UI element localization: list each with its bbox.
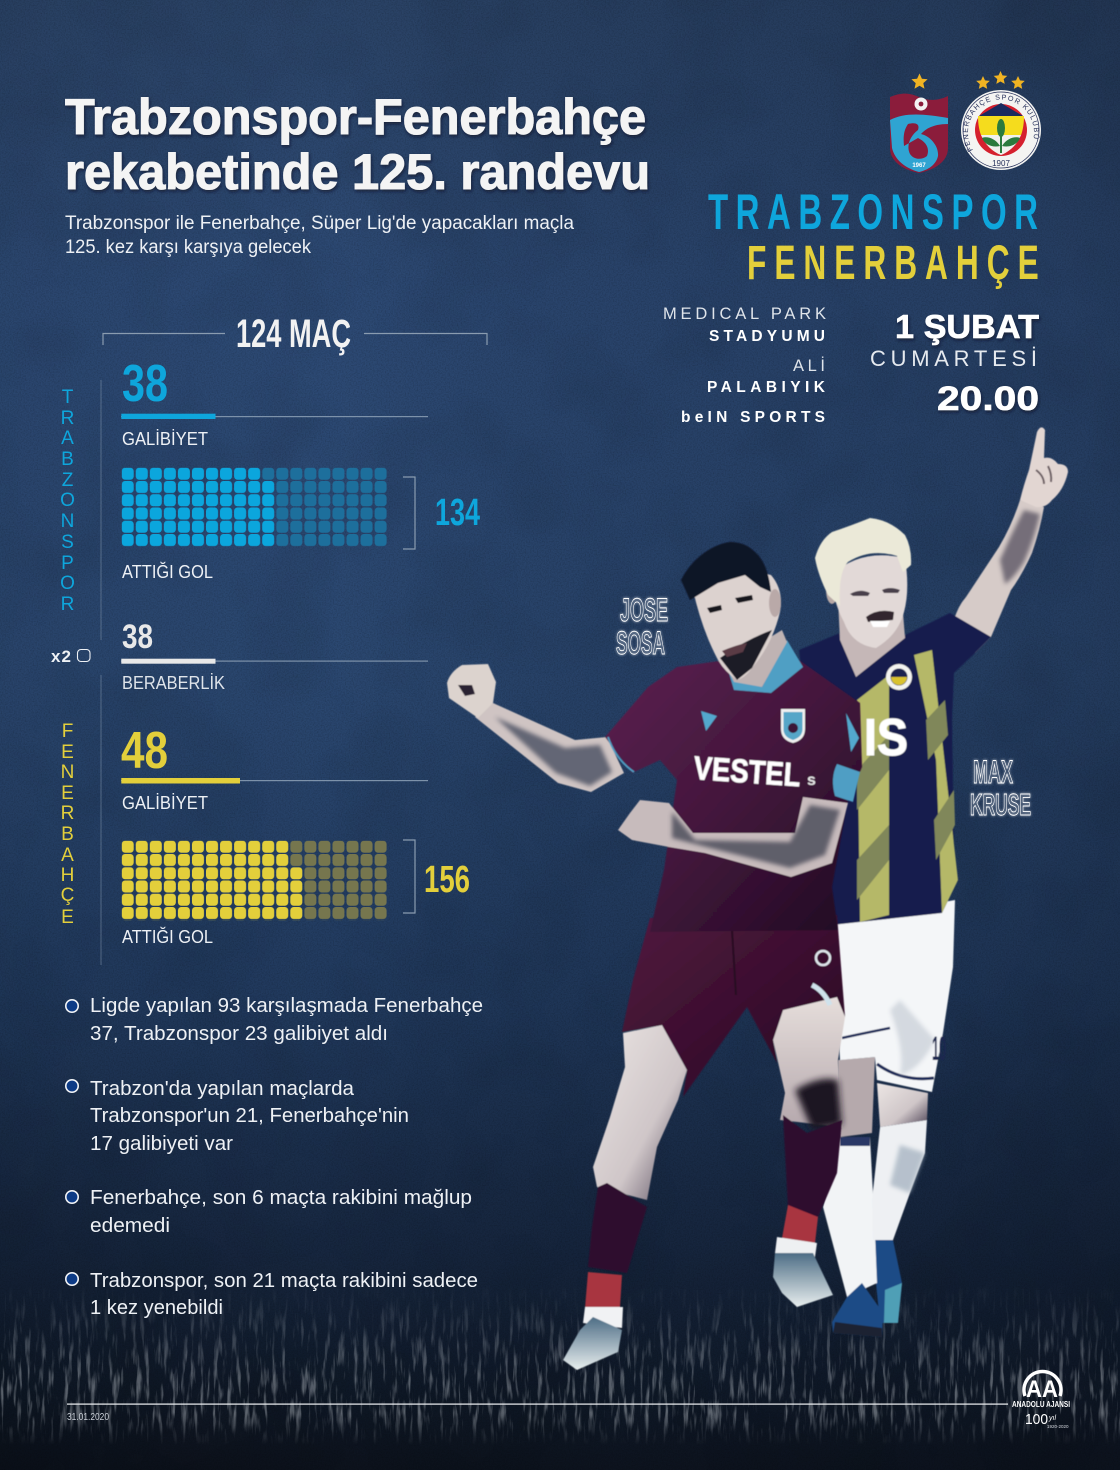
neck bbox=[725, 630, 787, 687]
face bbox=[693, 572, 781, 680]
date: 31.01.2020 bbox=[67, 1412, 109, 1423]
fact 3 bbox=[66, 1187, 472, 1237]
fact 2: Trabzon'da yapılan maçlarda bbox=[90, 1078, 355, 1100]
jersey sponsor: IS bbox=[864, 709, 908, 767]
fact 2: 17 galibiyeti var bbox=[90, 1133, 233, 1155]
Fenerbahçe wins: GALİBİYET bbox=[122, 793, 208, 813]
Anadolu Ajansi logo: 1920-2020 bbox=[1047, 1424, 1069, 1429]
sleeve trim bbox=[608, 737, 634, 772]
title: Trabzonspor-Fenerbahçe bbox=[65, 89, 646, 145]
vertical label: Trabzonspor: A bbox=[61, 428, 74, 449]
vertical label: Trabzonspor: Z bbox=[62, 470, 74, 491]
match date and time bbox=[870, 308, 1039, 418]
vertical label: Trabzonspor: O bbox=[60, 573, 75, 594]
fact 1: Ligde yapılan 93 karşılaşmada Fenerbahçe bbox=[90, 995, 483, 1017]
title bbox=[65, 89, 650, 200]
match date and time: CUMARTESİ bbox=[870, 346, 1037, 371]
Anadolu Ajansi logo: 100 bbox=[1025, 1411, 1048, 1428]
vertical label: Fenerbahçe: F bbox=[62, 721, 73, 742]
Anadolu Ajansi logo: AA bbox=[1026, 1376, 1058, 1403]
icon: Trabzonspor crest bbox=[890, 74, 948, 173]
lower arm bbox=[618, 797, 848, 877]
label: Jose Sosa bbox=[616, 592, 668, 661]
vertical label: Fenerbahçe: B bbox=[61, 824, 74, 845]
player: Max Kruse: 10 bbox=[932, 1030, 946, 1068]
vertical label: Trabzonspor: N bbox=[61, 511, 74, 532]
vertical label: Fenerbahçe: A bbox=[61, 845, 74, 866]
icon: Fenerbahçe crest: FENERBAHÇE SPOR KULÜBÜ bbox=[963, 94, 1040, 152]
captain armband bbox=[833, 764, 860, 802]
heading: Trabzonspor: TRABZONSPOR bbox=[708, 184, 1038, 240]
match details: venue, referee, broadcaster: ALİ bbox=[793, 356, 825, 375]
jersey crest bbox=[781, 709, 805, 743]
Anadolu Ajansi logo: ANADOLU AJANSI bbox=[1012, 1399, 1070, 1409]
legs bbox=[563, 997, 845, 1370]
footer rule bbox=[67, 1404, 1008, 1405]
fact 2 bbox=[66, 1078, 409, 1155]
jersey bbox=[605, 660, 862, 932]
fact list bbox=[66, 995, 483, 1319]
vertical label: Fenerbahçe: E bbox=[61, 783, 74, 804]
draws: BERABERLİK bbox=[122, 673, 225, 693]
fact 1: 37, Trabzonspor 23 galibiyet aldı bbox=[90, 1023, 388, 1045]
label: Max Kruse bbox=[970, 754, 1031, 822]
match details: venue, referee, broadcaster: STADYUMU bbox=[709, 328, 825, 345]
vertical label: Trabzonspor: S bbox=[61, 532, 74, 553]
label: Jose Sosa: JOSE bbox=[620, 592, 668, 628]
vertical label: Trabzonspor: T bbox=[62, 387, 74, 408]
title: rekabetinde 125. randevu bbox=[65, 144, 650, 200]
subtitle: 125. kez karşı karşıya gelecek bbox=[65, 237, 311, 258]
neck bbox=[838, 600, 905, 677]
collar bbox=[726, 640, 803, 693]
player: Max Kruse bbox=[799, 427, 1068, 1337]
Fenerbahçe wins bbox=[121, 722, 428, 813]
label: Jose Sosa: SOSA bbox=[616, 625, 665, 661]
subtitle bbox=[65, 213, 574, 258]
shorts bbox=[622, 915, 845, 1097]
fact 3: edemedi bbox=[90, 1215, 170, 1237]
Anadolu Ajansi logo: yıl bbox=[1048, 1415, 1056, 1422]
jersey bbox=[799, 613, 991, 925]
vertical label: Fenerbahçe: H bbox=[61, 865, 74, 886]
raised arm and hand bbox=[954, 427, 1068, 653]
vertical label: Fenerbahçe: N bbox=[61, 762, 74, 783]
Trabzonspor goals dot chart: ATTIĞI GOL bbox=[122, 561, 213, 582]
fact 4: Trabzonspor, son 21 maçta rakibini sadece bbox=[90, 1270, 478, 1292]
match details: venue, referee, broadcaster bbox=[663, 305, 826, 426]
vertical label: Trabzonspor: R bbox=[61, 594, 74, 615]
Fenerbahçe goals dot chart: 156 bbox=[424, 859, 470, 901]
vertical label: Trabzonspor: O bbox=[60, 490, 75, 511]
jersey stripes bbox=[857, 650, 958, 922]
vertical label: Trabzonspor: R bbox=[61, 408, 74, 429]
hair bbox=[681, 542, 771, 600]
icon: Trabzonspor crest: 1967 bbox=[912, 163, 926, 169]
vertical label: Fenerbahçe: E bbox=[61, 742, 74, 763]
vertical label: Trabzonspor bbox=[60, 387, 75, 615]
kit logos bbox=[701, 711, 859, 752]
draws: 38 bbox=[122, 618, 153, 656]
hair bbox=[815, 518, 911, 606]
Trabzonspor goals dot chart: 134 bbox=[435, 492, 480, 534]
Fenerbahçe goals dot chart: ATTIĞI GOL bbox=[122, 926, 213, 947]
Fenerbahçe wins: 48 bbox=[121, 722, 168, 780]
Anadolu Ajansi logo bbox=[1012, 1372, 1070, 1429]
Trabzonspor goals dot chart bbox=[122, 468, 480, 582]
fact 4: 1 kez yenebildi bbox=[90, 1297, 223, 1319]
stats frame: 124 matches: 124 MAÇ bbox=[236, 312, 351, 356]
fist bbox=[447, 664, 496, 718]
player: Jose Sosa bbox=[447, 542, 862, 1370]
player: Jose Sosa: s bbox=[807, 772, 816, 789]
heading: Fenerbahçe: FENERBAHÇE bbox=[747, 235, 1039, 290]
vertical label: Trabzonspor: P bbox=[61, 553, 74, 574]
jersey crest bbox=[886, 664, 912, 690]
match details: venue, referee, broadcaster: beIN SPORTS bbox=[681, 409, 825, 426]
match date and time: 20.00 bbox=[937, 380, 1039, 418]
fact 3: Fenerbahçe, son 6 maçta rakibini mağlup bbox=[90, 1187, 472, 1209]
draws bbox=[121, 618, 428, 693]
raised arm bbox=[475, 703, 624, 792]
Trabzonspor wins: GALİBİYET bbox=[122, 429, 208, 449]
Fenerbahçe goals dot chart bbox=[122, 840, 470, 947]
vertical label: Fenerbahçe bbox=[61, 721, 74, 928]
vertical label: Trabzonspor: B bbox=[61, 449, 74, 470]
match details: venue, referee, broadcaster: MEDICAL PARK bbox=[663, 305, 826, 323]
draws multiplier note bbox=[51, 647, 90, 666]
vertical label: Fenerbahçe: R bbox=[61, 803, 74, 824]
icon: Fenerbahçe crest: 1907 bbox=[992, 159, 1010, 168]
Trabzonspor wins bbox=[121, 355, 428, 449]
match details: venue, referee, broadcaster: PALABIYIK bbox=[707, 379, 826, 396]
icon: Fenerbahçe crest bbox=[961, 71, 1041, 170]
vertical label: Fenerbahçe: Ç bbox=[61, 885, 74, 906]
vertical label: Fenerbahçe: E bbox=[61, 907, 74, 928]
match date and time: 1 ŞUBAT bbox=[895, 308, 1039, 345]
draws multiplier note: x2 bbox=[51, 647, 71, 666]
label: Max Kruse: MAX bbox=[973, 754, 1013, 790]
stats frame: 124 matches bbox=[101, 312, 487, 965]
subtitle: Trabzonspor ile Fenerbahçe, Süper Lig'de yapacakları maçla bbox=[65, 213, 574, 234]
face bbox=[832, 555, 907, 648]
shorts bbox=[832, 900, 955, 1092]
fact 4 bbox=[66, 1270, 478, 1319]
label: Max Kruse: KRUSE bbox=[970, 787, 1031, 822]
Trabzonspor wins: 38 bbox=[122, 355, 168, 413]
shoes and socks bbox=[823, 1057, 928, 1337]
jersey sponsor: VESTEL bbox=[693, 749, 802, 793]
fact 1 bbox=[66, 995, 483, 1045]
fact 2: Trabzonspor'un 21, Fenerbahçe'nin bbox=[90, 1105, 409, 1127]
